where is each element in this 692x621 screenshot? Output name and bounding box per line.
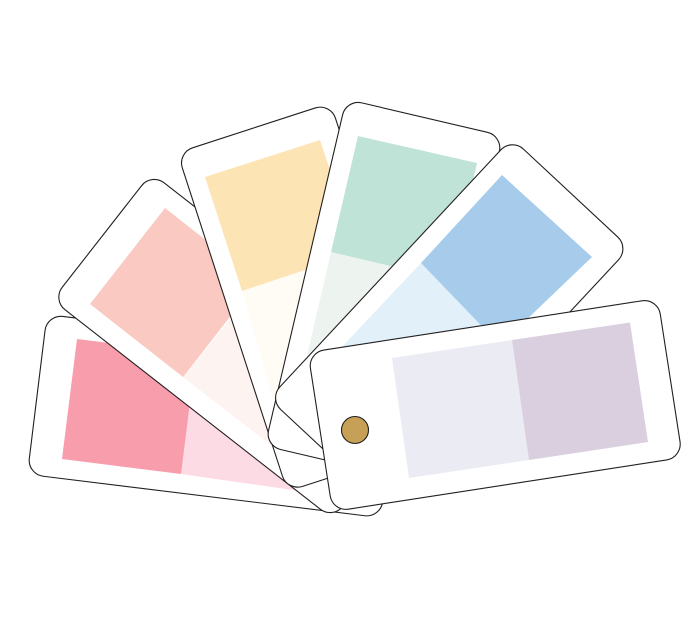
- card: lavender with hole: [308, 298, 682, 512]
- icon: gold eyelet: [342, 416, 368, 444]
- card: blue: [269, 138, 630, 508]
- card: salmon: [52, 173, 432, 519]
- card: pink: [27, 314, 400, 518]
- swatch: light lavender: [392, 340, 529, 478]
- card: green: [265, 99, 503, 483]
- swatch: dark lavender: [512, 322, 648, 460]
- card: yellow: [177, 103, 441, 491]
